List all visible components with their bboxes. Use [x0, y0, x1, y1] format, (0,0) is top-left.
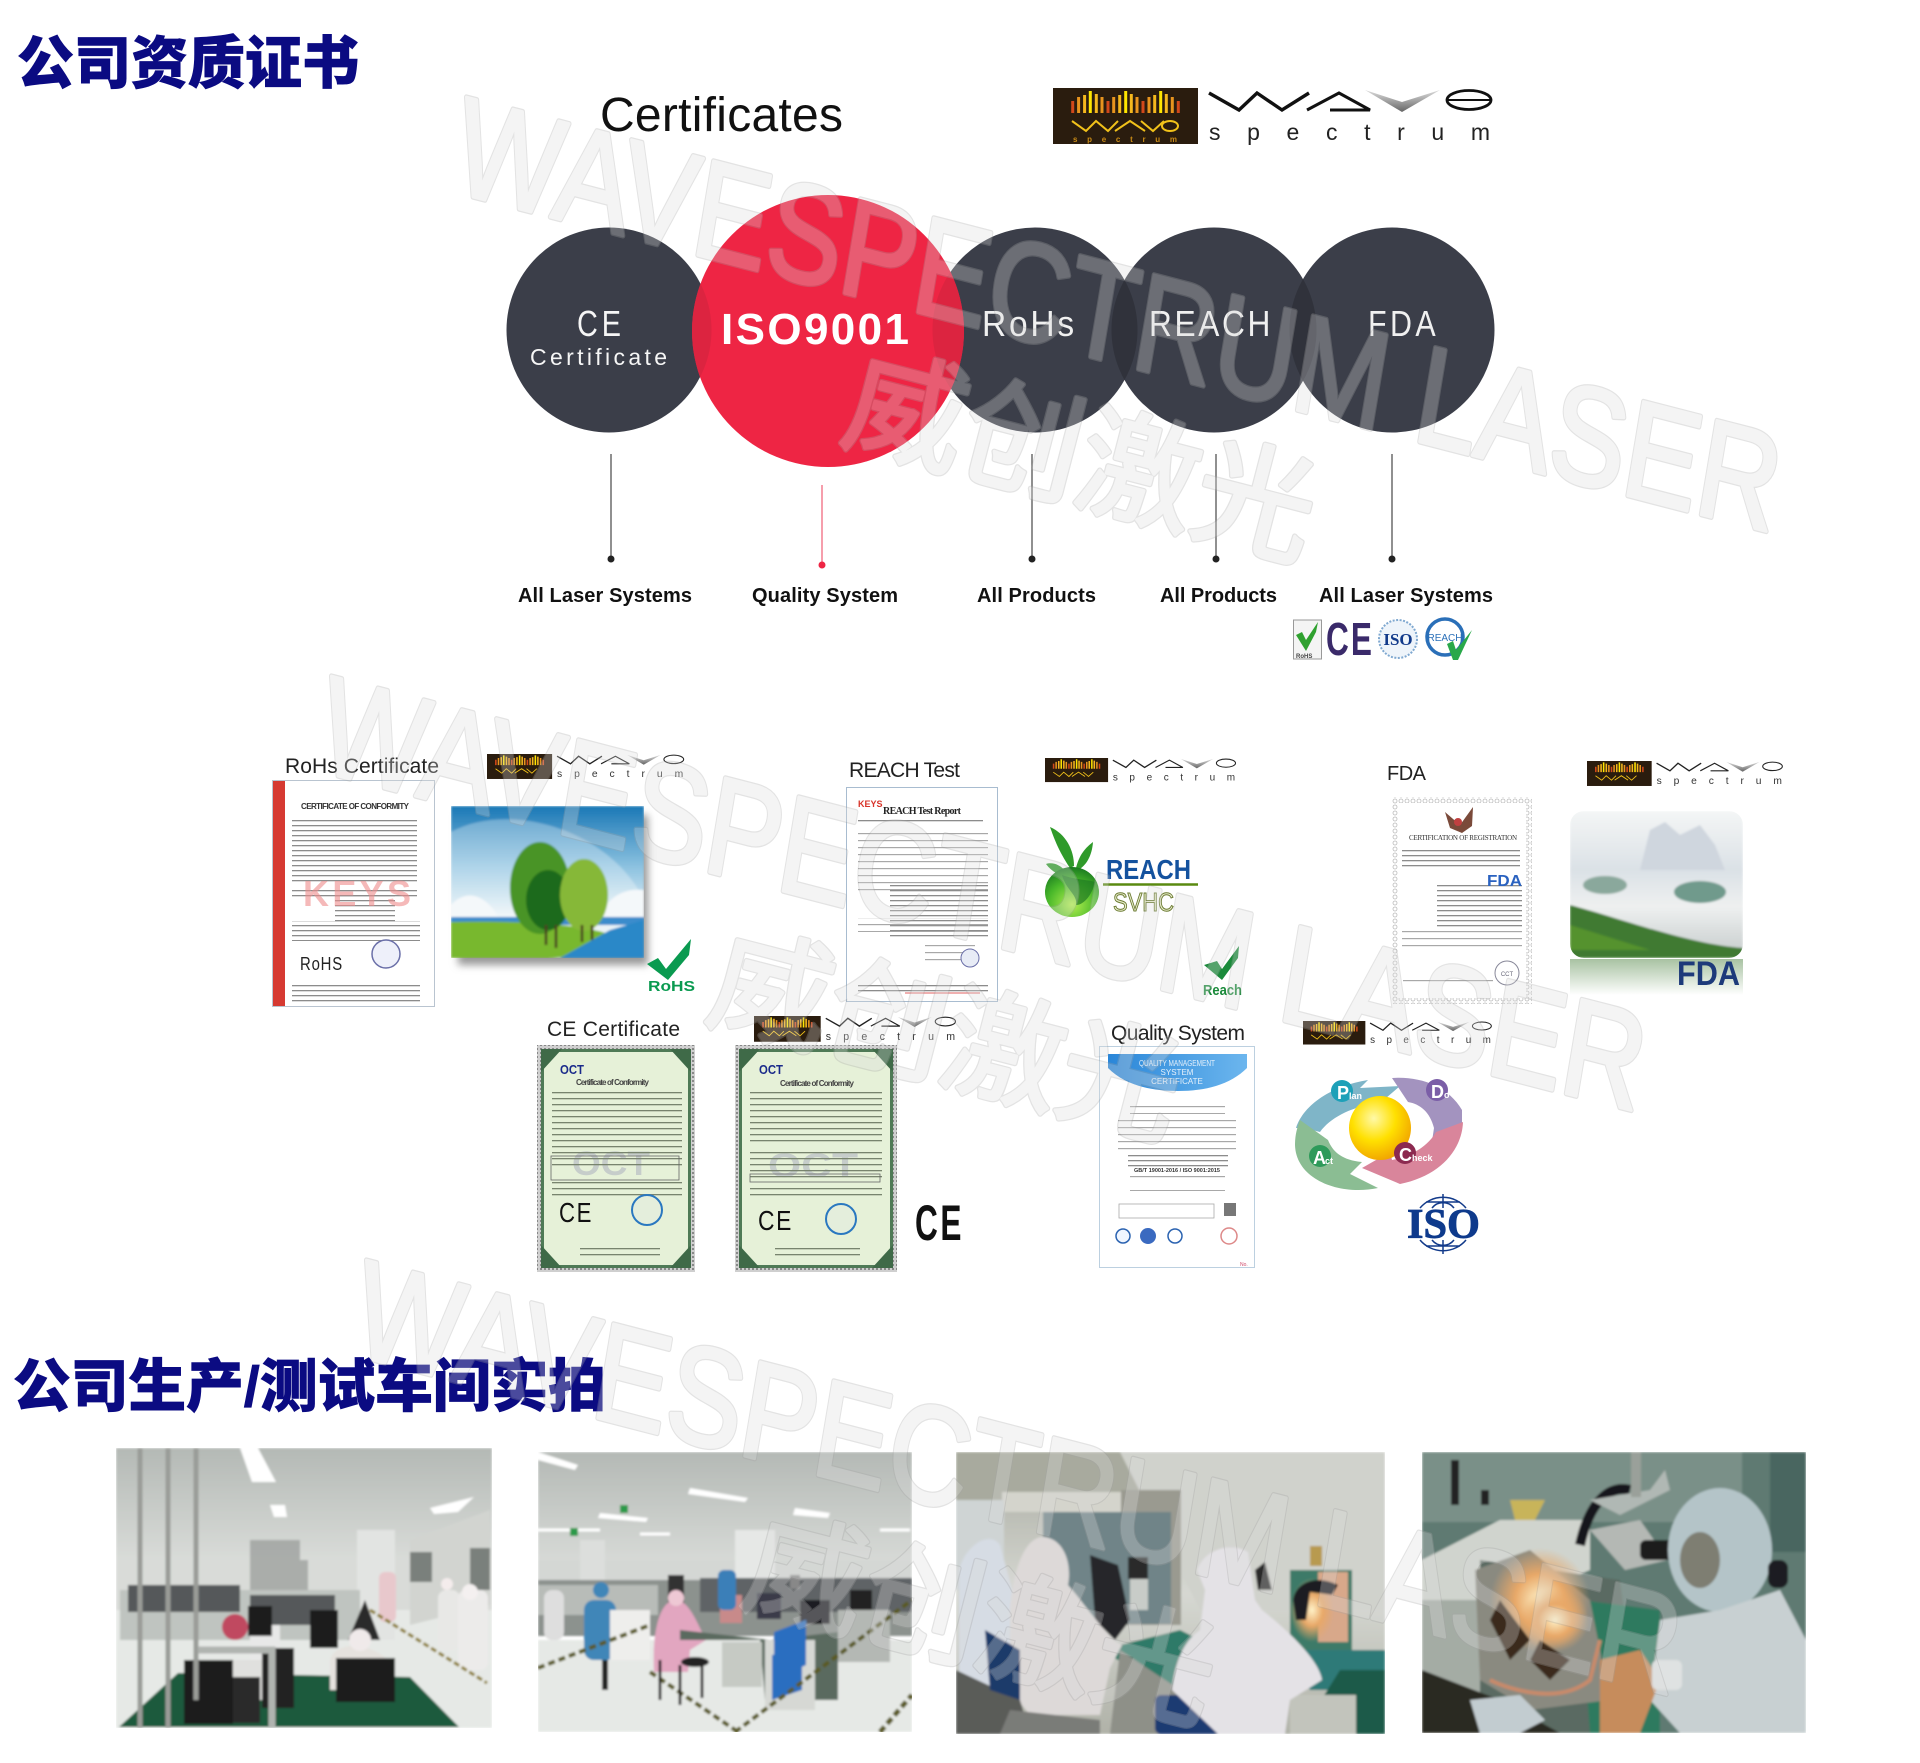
- certificate: quality management document: CERTIFICATE: [1151, 1077, 1203, 1086]
- certificate: FDA registration: CCT: [1501, 972, 1513, 978]
- certificate: FDA registration: [1392, 797, 1532, 1004]
- connector: CE: [610, 454, 612, 558]
- dot: RoHs: [1028, 556, 1036, 562]
- icon: RoHS check: [1294, 620, 1322, 660]
- divider: REACH line: [1103, 883, 1198, 886]
- certificate: CE document two: CE: [758, 1205, 793, 1236]
- caption: CE Certificate: CE Certificate: [547, 1018, 680, 1041]
- logo text: REACH: REACH: [1106, 854, 1191, 885]
- icon: ISO seal: [1379, 620, 1417, 658]
- label: RoHs: RoHs: [982, 303, 1077, 344]
- photo: clean-room production line one: [116, 1448, 492, 1728]
- logo: Wave Spectrum: [1045, 758, 1236, 783]
- panel: RoHS certificate group: [272, 754, 695, 1006]
- watermark: lower Wavespectrum Laser chinese: 威创激光: [731, 1496, 1230, 1746]
- overlap: RoHs and REACH: [1112, 280, 1138, 380]
- panel: CE certificate group: [537, 1016, 964, 1272]
- arrow: Check segment: [1362, 1122, 1463, 1184]
- label: Certificate: Certificate: [530, 344, 667, 370]
- diagram: five certification circles: [506, 195, 1494, 467]
- diagram: PDCA cycle: [1295, 1078, 1463, 1190]
- dot: ISO9001: [818, 562, 826, 568]
- arrow: Do segment: [1392, 1078, 1462, 1155]
- caption: Quality System: Quality System: [1111, 1022, 1245, 1045]
- logo: Wave Spectrum: spectrum: [557, 769, 683, 780]
- watermark: middle Wavespectrum Laser latin: WAVESPECTRUM LASER: [310, 647, 1657, 1141]
- certificate: CE document two: [735, 1045, 897, 1272]
- watermark: upper Wavespectrum Laser chinese: 威创激光: [831, 333, 1330, 583]
- logo: Wave Spectrum: spectrum: [826, 1031, 955, 1043]
- heading: production and test workshop photos: 公司生产/测试车间实拍: [13, 1355, 606, 1419]
- watermark: upper Wavespectrum Laser chinese: 威创激光: [831, 333, 1330, 583]
- icon: Reach green check: Reach: [1203, 982, 1242, 999]
- overlap: REACH and FDA: [1290, 280, 1316, 380]
- dot: CE: [608, 556, 614, 562]
- certificate: RoHS document: RoHS: [300, 954, 343, 974]
- icon row: RoHS, CE, ISO, REACH: [1294, 613, 1472, 665]
- image: misty mountain tea field: [1570, 811, 1743, 995]
- overlap: ISO and RoHs: [932, 272, 964, 389]
- certificate: CE document one: OCT: [572, 1145, 650, 1183]
- badge: Check: C: [1399, 1145, 1412, 1165]
- badge: Act: A: [1313, 1148, 1326, 1168]
- connector: FDA: [1391, 454, 1393, 558]
- watermark: middle Wavespectrum Laser chinese: 威创激光: [696, 912, 1195, 1162]
- photo: operator welding under microscope: [1422, 1452, 1806, 1733]
- circle: CE: [506, 228, 712, 432]
- label: FDA: FDA: [1368, 303, 1439, 344]
- logo text: SVHC: SVHC: [1113, 887, 1174, 917]
- panel: REACH test group: [846, 758, 1242, 1002]
- caption: REACH Test: REACH Test: [849, 759, 960, 782]
- certificate: REACH document: KEYS: [858, 799, 883, 809]
- logo: Wave Spectrum: [1587, 761, 1782, 787]
- badge: Plan: lan: [1349, 1091, 1362, 1101]
- scope label: ISO9001: Quality System: [752, 585, 898, 607]
- caption: RoHs Certificate: RoHs Certificate: [285, 755, 439, 778]
- badge: Do: [1426, 1079, 1450, 1102]
- certificate: CE document two: Certificate of Conformity: [780, 1079, 855, 1088]
- logo: Wave Spectrum: spectrum: [1657, 776, 1782, 787]
- icon: RoHS check: RoHS: [1296, 654, 1312, 660]
- label: ISO9001: ISO9001: [721, 305, 909, 354]
- certificate: FDA registration: FDA: [1487, 873, 1522, 890]
- scope label: RoHs: All Products: [977, 585, 1096, 607]
- badge: Check: heck: [1412, 1153, 1434, 1163]
- watermark: middle Wavespectrum Laser latin: WAVESPECTRUM LASER: [310, 647, 1657, 1141]
- photo: clean-room production line two: [538, 1452, 912, 1732]
- certificate: CE document one: OCT: [560, 1062, 584, 1077]
- logo: Wave Spectrum: spectrum: [1113, 772, 1235, 783]
- badge: Act: ct: [1325, 1156, 1333, 1166]
- arrow: Act segment: [1295, 1120, 1378, 1190]
- watermark: lower Wavespectrum Laser chinese: 威创激光: [731, 1496, 1230, 1746]
- badge: Do: o: [1444, 1090, 1450, 1100]
- certificate: CE document one: [537, 1045, 695, 1272]
- icon: RoHS green check: RoHS: [648, 978, 695, 995]
- panel: FDA group: [1387, 761, 1782, 1004]
- certificate: CE document two: OCT: [759, 1062, 783, 1077]
- badge: Plan: [1331, 1080, 1362, 1103]
- dot: FDA: [1388, 556, 1396, 562]
- sphere: centre: [1349, 1096, 1411, 1160]
- certificate: CE document one: CE: [559, 1197, 593, 1228]
- certificate: REACH document: REACH Test Report: [883, 806, 962, 817]
- logo: Wave Spectrum: [754, 1016, 955, 1043]
- overlap: ISO and CE: [692, 284, 712, 377]
- scope label: REACH: All Products: [1160, 585, 1277, 607]
- logo: Wave Spectrum main: [1053, 88, 1491, 145]
- logo: Wave Spectrum: [1303, 1021, 1491, 1046]
- watermark: middle Wavespectrum Laser chinese: 威创激光: [696, 912, 1195, 1162]
- circle: FDA: [1290, 228, 1494, 432]
- heading: Certificates: Certificates: [600, 89, 843, 142]
- circle: RoHs: [932, 228, 1138, 432]
- badge: Plan: P: [1337, 1083, 1349, 1103]
- icon: REACH globe with leaves: [1045, 827, 1099, 917]
- certificate: quality management document: [1100, 1046, 1254, 1268]
- connector: RoHs: [1031, 454, 1033, 558]
- circle: REACH: [1112, 228, 1316, 432]
- logo: Wave Spectrum main: spectrum: [1073, 135, 1177, 144]
- scope label: FDA: All Laser Systems: [1319, 585, 1493, 607]
- certificate: CE document one: Certificate of Conformity: [576, 1078, 650, 1087]
- scope label: CE: All Laser Systems: [518, 585, 692, 607]
- image: tree under dome: [451, 806, 648, 965]
- heading: company certificates: 公司资质证书: [17, 32, 359, 96]
- icon: CE mark: CE: [1326, 613, 1374, 665]
- icon: RoHS green check: [647, 939, 695, 995]
- certificate: RoHS document: KEYS: [303, 873, 411, 914]
- arrow: Plan segment: [1296, 1080, 1400, 1132]
- circle: ISO9001: [692, 195, 964, 467]
- badge: Act: [1309, 1145, 1333, 1168]
- connector: ISO9001: [821, 485, 823, 564]
- icon: ISO seal: ISO: [1383, 630, 1413, 649]
- logo: ISO globe: ISO: [1407, 1202, 1480, 1248]
- label: REACH: REACH: [1149, 303, 1273, 344]
- certificate: RoHS document: [272, 780, 434, 1006]
- panel: quality system group: [1100, 1021, 1491, 1268]
- label: CE: CE: [577, 303, 625, 344]
- icon: REACH seal: [1427, 619, 1472, 660]
- connector lines and scope labels: [518, 454, 1493, 607]
- certificate: CE document two: OCT: [768, 1147, 858, 1185]
- badge: Check: [1394, 1142, 1434, 1165]
- logo: Wave Spectrum: [487, 754, 684, 780]
- certificate: quality management document: No.: [1240, 1262, 1248, 1268]
- certificate: quality management document: GB/T 19001-2016 / ISO 9001:2015: [1134, 1168, 1220, 1174]
- icon: REACH seal: REACH: [1427, 633, 1463, 644]
- icon: Reach green check: [1203, 946, 1242, 999]
- connector: REACH: [1215, 454, 1217, 558]
- photo: technicians at microscopes: [956, 1452, 1385, 1734]
- logo text: FDA on image: FDA: [1677, 955, 1740, 993]
- certificate: quality management document: QUALITY MANAGEMENT: [1139, 1059, 1215, 1068]
- logo: Wave Spectrum: spectrum: [1370, 1035, 1491, 1046]
- badge: Do: D: [1431, 1082, 1444, 1102]
- certificate: RoHS document: CERTIFICATE OF CONFORMITY: [301, 802, 410, 811]
- logo: Wave Spectrum main: spectrum: [1209, 119, 1490, 145]
- certificate: quality management document: SYSTEM: [1161, 1068, 1194, 1077]
- caption: FDA: FDA: [1387, 763, 1427, 785]
- dot: REACH: [1212, 556, 1220, 562]
- icon: CE mark: CE: [915, 1195, 964, 1251]
- certificate: REACH document: [846, 788, 998, 1002]
- certificate: FDA registration: CERTIFICATION OF REGISTRATION: [1409, 834, 1517, 842]
